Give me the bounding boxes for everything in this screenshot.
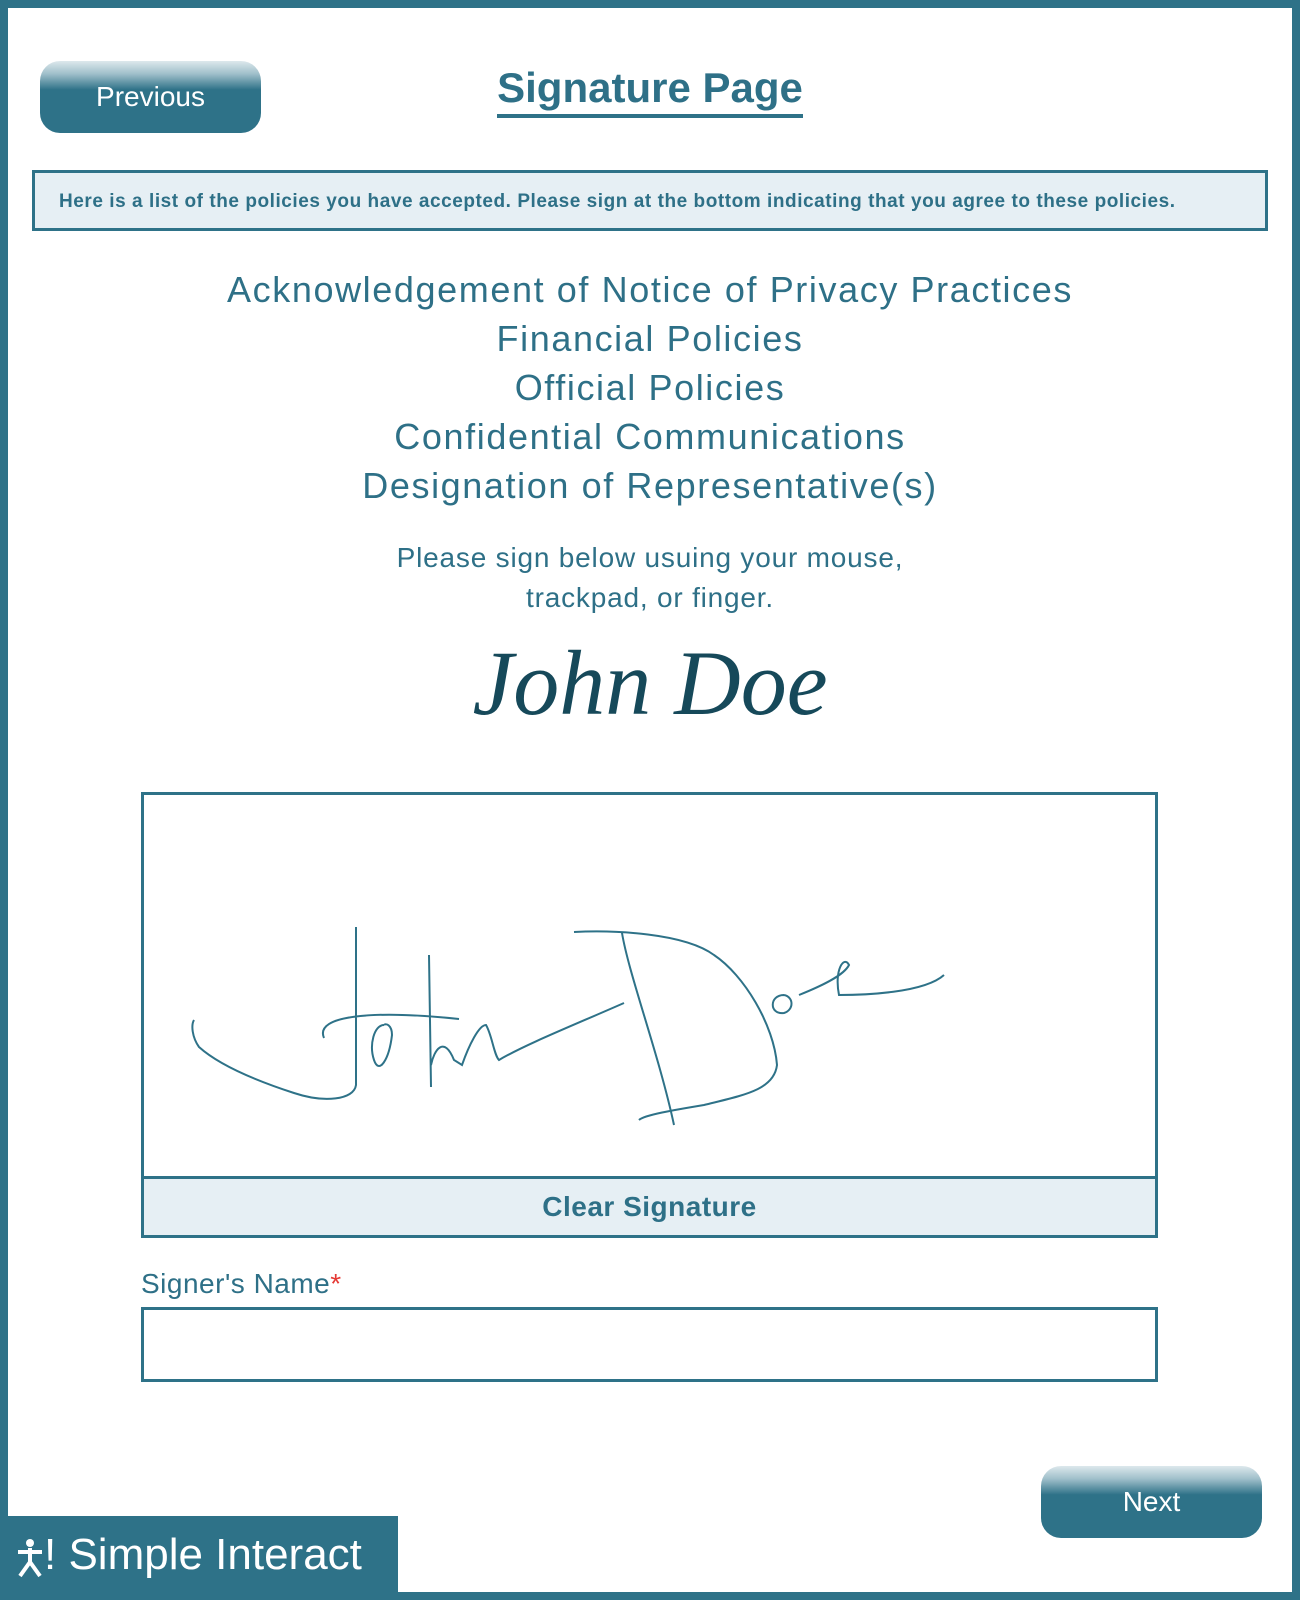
policy list [227, 269, 1073, 506]
button: next: Next [1123, 1486, 1180, 1517]
logo: ! Simple Interact [44, 1530, 362, 1579]
button: previous [40, 61, 261, 133]
title: Signature Page [497, 64, 803, 111]
policy list: Financial Policies [497, 318, 803, 359]
info box [32, 170, 1268, 231]
policy list: Confidential Communications [394, 416, 906, 457]
instructions [397, 542, 903, 613]
drawn signature [191, 927, 945, 1126]
instructions: trackpad, or finger. [526, 582, 774, 613]
clear signature bar: Clear Signature [542, 1191, 757, 1222]
instructions: Please sign below usuing your mouse, [397, 542, 903, 573]
info box: Here is a list of the policies you have accepted. Please sign at the bottom indicating that you agree to these policies. [59, 191, 1176, 212]
signer name label: Signer's Name* [141, 1268, 342, 1299]
clear signature bar [144, 1176, 1155, 1235]
button: next [1041, 1466, 1262, 1538]
signature box [141, 792, 1158, 1238]
signature preview: John Doe [472, 632, 828, 734]
button: previous: Previous [96, 81, 205, 112]
policy list: Official Policies [515, 367, 785, 408]
icon: person [18, 1539, 42, 1578]
name input [141, 1307, 1158, 1382]
policy list: Designation of Representative(s) [362, 465, 938, 506]
policy list: Acknowledgement of Notice of Privacy Practices [227, 269, 1073, 310]
logo [0, 1516, 398, 1600]
